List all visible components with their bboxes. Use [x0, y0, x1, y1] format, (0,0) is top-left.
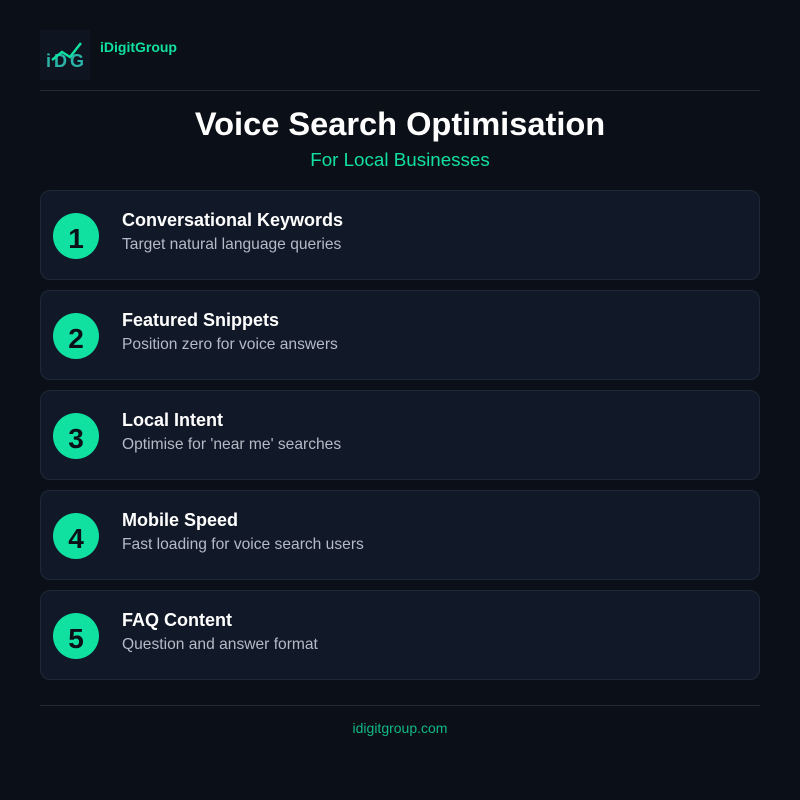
card 4: Mobile Speed	[122, 510, 238, 530]
card 3: Local Intent	[122, 410, 223, 430]
brand name: iDigitGroup	[100, 39, 177, 55]
card 1: 1	[68, 223, 84, 254]
card 1: Target natural language queries	[122, 236, 341, 253]
card 3	[40, 390, 760, 480]
card 4	[40, 490, 760, 580]
card 4: 4	[68, 523, 84, 554]
card 1: Conversational Keywords	[122, 210, 343, 230]
card 3: Optimise for 'near me' searches	[122, 436, 341, 453]
card 2: Featured Snippets	[122, 310, 279, 330]
card 3: 3	[68, 423, 84, 454]
card 2: Position zero for voice answers	[122, 336, 338, 353]
logo: iDG	[46, 51, 84, 71]
card 1	[40, 190, 760, 280]
card 5: 5	[68, 623, 84, 654]
footer: idigitgroup.com	[353, 720, 447, 736]
card 4: Fast loading for voice search users	[122, 536, 364, 553]
subtitle: For Local Businesses	[310, 149, 490, 170]
card 5	[40, 590, 760, 680]
card 2	[40, 290, 760, 380]
card 2: 2	[68, 323, 84, 354]
logo	[40, 30, 90, 80]
card 5: FAQ Content	[122, 610, 232, 630]
title: Voice Search Optimisation	[195, 105, 605, 142]
card 5: Question and answer format	[122, 636, 318, 653]
